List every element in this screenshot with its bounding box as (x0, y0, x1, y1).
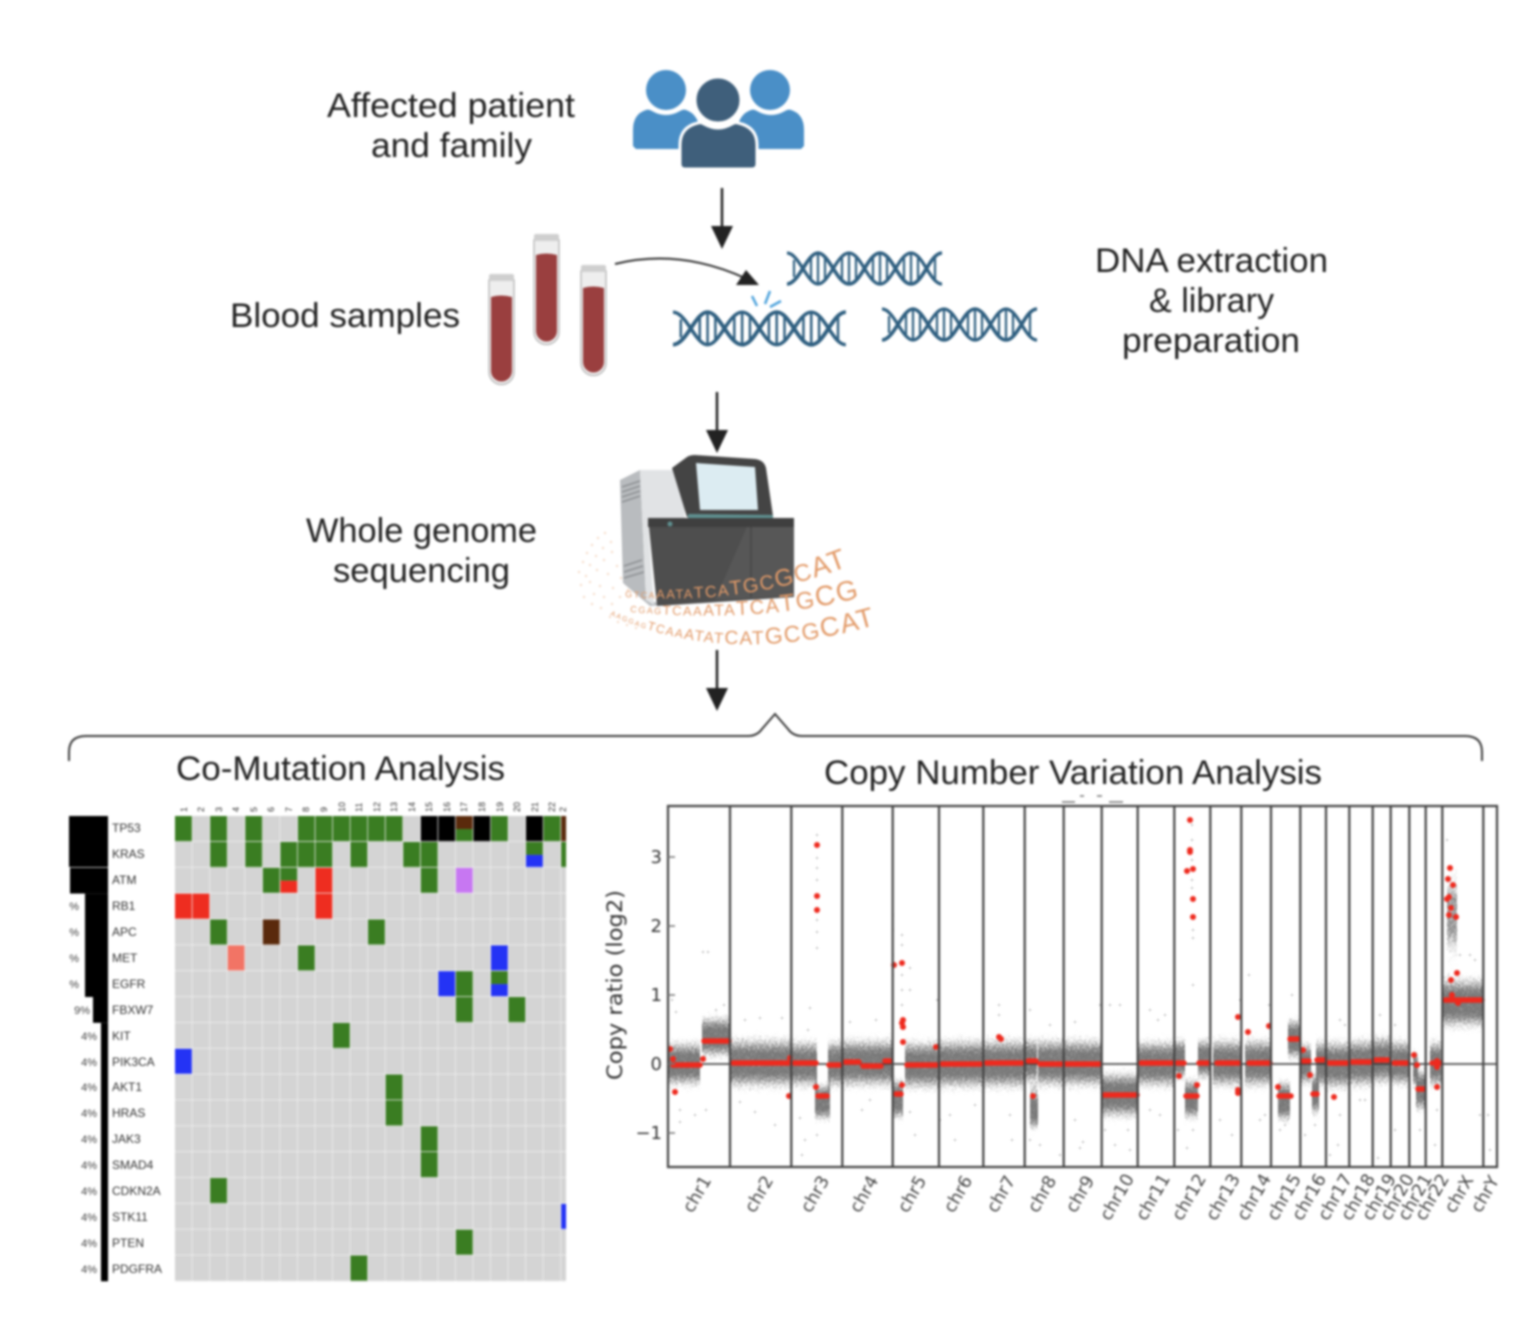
grey copy ratio point clouds (668, 850, 1483, 1140)
heatmap sample numbers: 12 (372, 802, 382, 812)
heatmap sample numbers: 2 (196, 807, 206, 812)
gene labels: EGFR (112, 977, 146, 991)
gene labels: APC (112, 925, 137, 939)
y axis tick labels: −1 (635, 1123, 662, 1144)
heatmap sample numbers: 20 (512, 802, 522, 812)
gene labels: STK11 (112, 1210, 148, 1224)
chromosome labels: chr16 (1288, 1171, 1331, 1224)
heatmap sample numbers: 14 (407, 802, 417, 812)
chromosome labels: chr8 (1024, 1173, 1061, 1216)
arrow: DNA to sequencing (706, 392, 728, 453)
chromosome labels: chr17 (1314, 1171, 1357, 1224)
y axis tick labels: 1 (651, 985, 662, 1006)
heatmap sample numbers: 2 (558, 807, 568, 812)
heatmap sample numbers: 17 (459, 802, 469, 812)
heatmap background (175, 816, 566, 1281)
heatmap sample numbers: 6 (266, 807, 276, 812)
heading: whole genome sequencing: sequencing (333, 552, 510, 590)
frequency percentage labels: 4% (81, 1082, 97, 1094)
chromosome labels: chr20 (1376, 1171, 1419, 1224)
chromosome labels: chr12 (1168, 1171, 1211, 1224)
gene labels: PIK3CA (112, 1055, 155, 1069)
heading: DNA extraction and library preparation: & library (1149, 282, 1274, 320)
chromosome labels: chr10 (1096, 1171, 1139, 1224)
gene labels: FBXW7 (112, 1003, 154, 1017)
heatmap sample numbers: 11 (354, 803, 364, 812)
bracket joining analyses (69, 714, 1482, 761)
heatmap sample numbers: 15 (424, 802, 434, 812)
heatmap sample numbers: 1 (179, 807, 189, 812)
frequency percentage labels: % (69, 901, 79, 913)
icon: patient and family group (633, 70, 804, 169)
chromosome labels: chr6 (940, 1173, 977, 1216)
chart frame and chromosome dividers (668, 806, 1497, 1167)
heatmap sample numbers: 4 (231, 807, 241, 812)
heading: whole genome sequencing: Whole genome (306, 512, 537, 550)
icon: DNA strands (673, 253, 1037, 345)
heatmap grid lines (175, 816, 566, 1281)
chromosome labels: chr18 (1337, 1171, 1380, 1224)
heading: blood samples: Blood samples (230, 297, 460, 335)
zero baseline (668, 1063, 1497, 1065)
heatmap sample numbers: 3 (214, 807, 224, 812)
frequency percentage labels: 4% (81, 1160, 97, 1172)
gene labels (112, 821, 162, 1276)
frequency percentage labels: % (69, 927, 79, 939)
panel: copy number variation chart (603, 796, 1504, 1224)
y axis tick labels: 2 (651, 916, 662, 937)
arrow: family to samples (711, 188, 733, 249)
y axis tick labels: 0 (651, 1054, 662, 1075)
gene labels: AKT1 (112, 1080, 142, 1094)
gene labels: CDKN2A (112, 1184, 161, 1198)
heatmap sample numbers: 5 (249, 807, 259, 812)
heading: affected patient and family (327, 87, 576, 165)
icon: sequencing machine (620, 455, 794, 606)
chromosome labels (679, 1171, 1504, 1224)
grey outlier points (672, 825, 1490, 1158)
chromosome labels: chr9 (1062, 1173, 1099, 1216)
chromosome labels: chr5 (894, 1173, 931, 1216)
heading: DNA extraction and library preparation: preparation (1122, 322, 1300, 360)
frequency percentage labels: 4% (81, 1031, 97, 1043)
y axis tick labels: 3 (651, 847, 662, 868)
y axis ticks and top dashes (668, 796, 1123, 1133)
heatmap sample numbers: 16 (442, 802, 452, 812)
chromosome labels: chr3 (797, 1173, 834, 1216)
frequency percentage labels: 4% (81, 1212, 97, 1224)
sequence reads text (577, 531, 872, 646)
frequency percentage labels: 9% (74, 1005, 90, 1017)
y axis title: Copy ratio (log2) (603, 890, 627, 1080)
chromosome labels: chr11 (1132, 1171, 1175, 1224)
heading: affected patient and family: Affected patient (327, 87, 576, 125)
heatmap sample numbers: 8 (301, 807, 311, 812)
y axis tick labels (635, 847, 662, 1144)
arrow: sequencing to analyses (706, 650, 728, 711)
heading: whole genome sequencing (306, 512, 537, 590)
red segment points (670, 820, 1458, 1097)
frequency percentage labels: 4% (81, 1186, 97, 1198)
heatmap sample numbers: 9 (319, 807, 329, 812)
heatmap sample numbers: 10 (337, 802, 347, 812)
panel: co-mutation heatmap (69, 802, 568, 1281)
chromosome labels: chr2 (741, 1173, 778, 1216)
gene labels: TP53 (112, 821, 141, 835)
gene labels: KIT (112, 1029, 131, 1043)
heading: affected patient and family: and family (371, 127, 532, 165)
chromosome labels: chr19 (1358, 1171, 1401, 1224)
sequence reads text: AAGGAGTCAAATATCATGCGCAT (610, 606, 872, 646)
sequence reads text: GTCAAATATCATGCGCAT (624, 548, 842, 600)
chromosome labels: chr13 (1202, 1171, 1245, 1224)
heading: copy number variation analysis: Copy Number Variation Analysis (824, 754, 1322, 792)
chromosome labels: chr21 (1394, 1171, 1437, 1224)
frequency percentage labels: 4% (81, 1134, 97, 1146)
sequence reads text: CGAGTCAAATATCATGCG (629, 579, 858, 617)
heatmap sample numbers: 22 (547, 802, 557, 812)
frequency percentage labels: 4% (81, 1108, 97, 1120)
frequency percentage labels: 4% (81, 1057, 97, 1069)
heatmap sample numbers: 21 (530, 802, 540, 812)
chromosome labels: chrY (1467, 1173, 1504, 1216)
gene labels: PDGFRA (112, 1262, 162, 1276)
heatmap sample numbers: 19 (495, 802, 505, 812)
frequency percentage labels: % (69, 979, 79, 991)
frequency percentage labels (69, 901, 97, 1276)
heatmap sample numbers: 7 (284, 807, 294, 812)
gene labels: MET (112, 951, 138, 965)
chromosome labels: chr1 (679, 1173, 716, 1216)
heading: co-mutation analysis: Co-Mutation Analysis (176, 750, 505, 788)
heatmap sample numbers (179, 802, 568, 812)
gene labels: RB1 (112, 899, 136, 913)
gene labels: ATM (112, 873, 136, 887)
gene labels: HRAS (112, 1106, 145, 1120)
frequency percentage labels: 4% (81, 1238, 97, 1250)
frequency percentage labels: 4% (81, 1264, 97, 1276)
chromosome labels: chr4 (846, 1173, 883, 1216)
chromosome labels: chr15 (1263, 1171, 1306, 1224)
chromosome labels: chr14 (1233, 1171, 1276, 1224)
gene labels: PTEN (112, 1236, 144, 1250)
chromosome labels: chr22 (1411, 1171, 1454, 1224)
heading: DNA extraction and library preparation: DNA extraction (1095, 242, 1328, 280)
red segment lines (673, 1000, 1482, 1096)
heatmap sample numbers: 18 (477, 802, 487, 812)
heading: DNA extraction and library preparation (1095, 242, 1328, 360)
gene labels: JAK3 (112, 1132, 141, 1146)
heatmap sample numbers: 13 (389, 802, 399, 812)
gene labels: KRAS (112, 847, 145, 861)
mutation frequency bars (69, 816, 108, 1281)
gene labels: SMAD4 (112, 1158, 154, 1172)
icon: blood sample tubes (489, 234, 606, 384)
heatmap mutation cells (175, 816, 566, 1281)
frequency percentage labels: % (69, 953, 79, 965)
chromosome labels: chr7 (983, 1173, 1020, 1216)
arrow: curved samples to DNA (615, 259, 759, 285)
chromosome labels: chrX (1441, 1172, 1478, 1217)
